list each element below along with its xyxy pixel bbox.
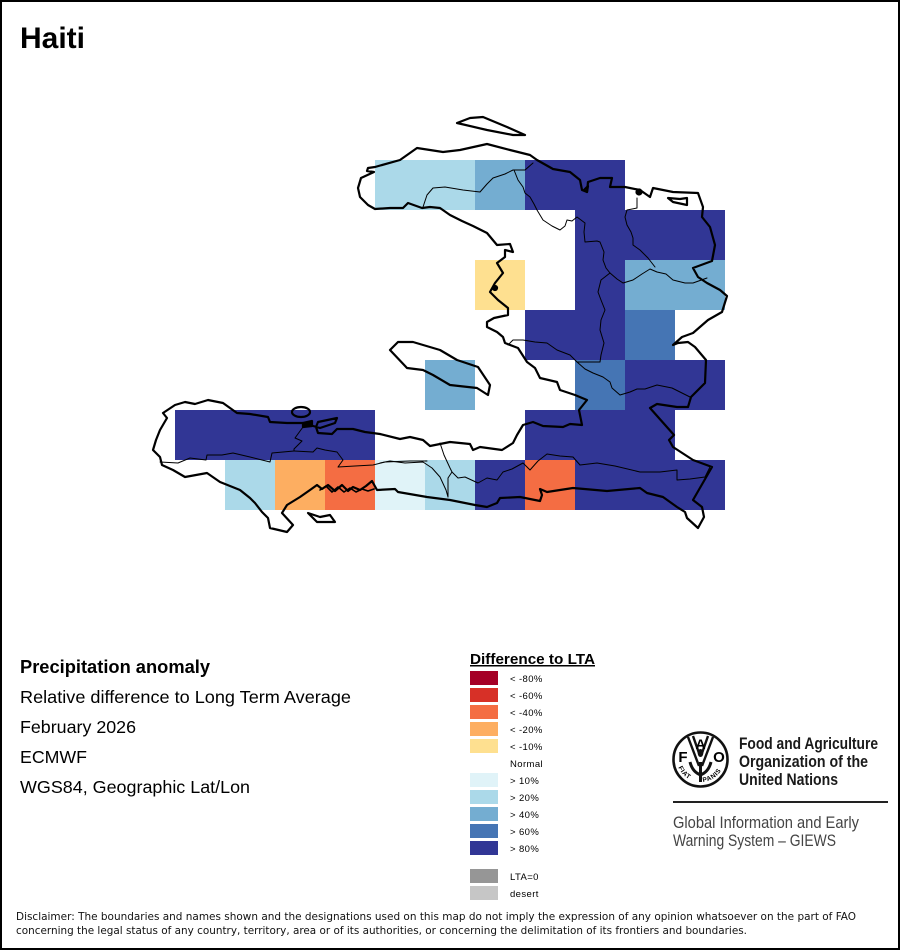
organisation name: United Nations (739, 770, 838, 789)
icon: FAO emblem: O (713, 749, 725, 766)
legend labels: > 40% (510, 810, 539, 821)
legend title: Difference to LTA (470, 651, 595, 668)
FAO GIEWS logo (672, 731, 888, 850)
date: February 2026 (20, 717, 136, 737)
anomaly grid cells (175, 160, 725, 510)
island: Gonave (390, 342, 490, 395)
disclaimer (16, 911, 856, 937)
lakes and coastal details (292, 186, 687, 492)
legend labels: < -40% (510, 708, 543, 719)
legend labels: < -60% (510, 691, 543, 702)
legend labels: > 80% (510, 844, 539, 855)
legend: difference to LTA (470, 651, 595, 900)
icon: FAO emblem: PANIS (702, 768, 720, 782)
legend labels: > 60% (510, 827, 539, 838)
disclaimer: concerning the legal status of any country, territory, area or of its authorities, or concerning the delimitation of its frontiers and boundaries. (16, 925, 747, 937)
legend labels: Normal (510, 759, 543, 770)
GIEWS name: Global Information and Early (673, 813, 859, 832)
organisation name (739, 734, 878, 789)
legend labels: desert (510, 889, 539, 900)
coastline: Hispaniola (153, 144, 727, 532)
island: Tortuga (457, 117, 525, 135)
icon: FAO emblem: FIAT (678, 766, 691, 778)
organisation name: Organization of the (739, 752, 868, 771)
island: Ile a Vache (308, 513, 335, 522)
legend labels: < -10% (510, 742, 543, 753)
legend labels: > 20% (510, 793, 539, 804)
icon: FAO emblem (672, 731, 729, 788)
map: precipitation anomaly grid and outlines (153, 117, 727, 532)
legend labels: < -20% (510, 725, 543, 736)
projection: WGS84, Geographic Lat/Lon (20, 777, 250, 797)
icon: FAO emblem: A (695, 736, 706, 752)
GIEWS name: Warning System – GIEWS (673, 831, 836, 850)
logo rule (673, 801, 888, 803)
title: Haiti (20, 22, 85, 55)
internal boundaries (160, 163, 710, 497)
product name: Precipitation anomaly (20, 657, 210, 677)
legend swatches (470, 671, 498, 900)
disclaimer: Disclaimer: The boundaries and names shown and the designations used on this map do not imply the expression of any opinion whatsoever on the part of FAO (16, 911, 856, 923)
info block (20, 657, 351, 797)
product description: Relative difference to Long Term Average (20, 687, 351, 707)
GIEWS name (673, 813, 859, 850)
legend labels (510, 674, 543, 900)
icon: FAO emblem: F (678, 749, 688, 766)
data source: ECMWF (20, 747, 87, 767)
legend labels: > 10% (510, 776, 539, 787)
legend labels: < -80% (510, 674, 543, 685)
legend labels: LTA=0 (510, 872, 539, 883)
